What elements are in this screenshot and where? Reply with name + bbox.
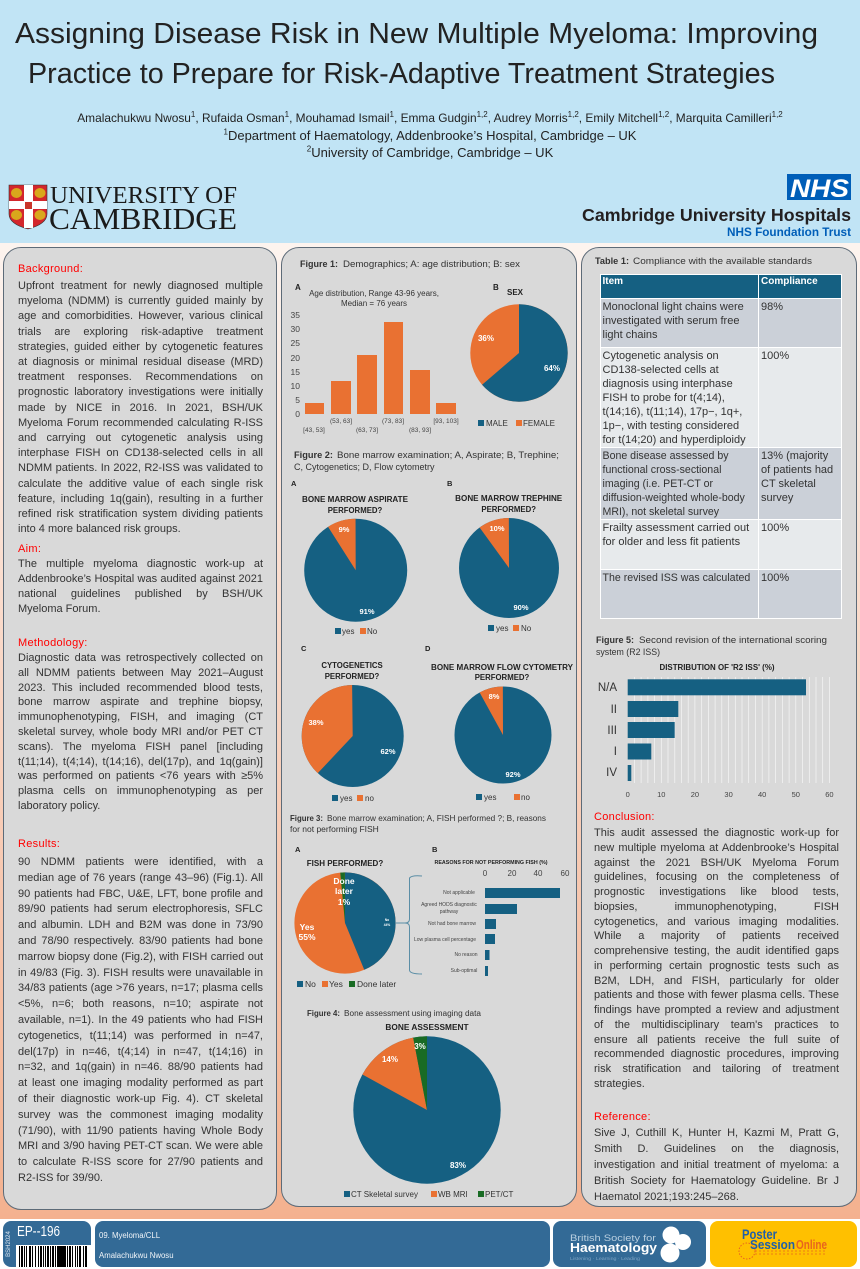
text: background: feature, including 1q(gain), resulting in a further (18, 493, 263, 505)
table 1: Monoclonal light chains were investigated with serum free light chains (602, 301, 744, 341)
panel: right column (581, 247, 857, 1207)
text: results: and 78/90 respectively. 83/90 patients had bone (18, 935, 263, 947)
chart: age distribution: Age distribution, Range 43-96 years, (309, 289, 439, 298)
chart: reasons for not performing FISH: Not had bone marrow (428, 921, 476, 927)
title (15, 18, 818, 90)
footer: British Society for Haematology logo: Haematology (570, 1241, 657, 1255)
chart: cytogenetics pie: 38% (308, 718, 324, 727)
chart: FISH performed pie: FISH PERFORMED? (307, 859, 383, 868)
text: aim: The multiple myeloma diagnostic work-up at (18, 558, 263, 570)
text: background: refined risk stratification system dividing patients (18, 508, 263, 520)
text: methodology: 2023. This included recommended blood tests, (18, 682, 263, 694)
chart: aspirate pie: yes (342, 627, 354, 636)
text: conclusion: biopsies, immunophenotyping, FISH (594, 901, 839, 913)
heading: aim: Aim: (18, 543, 41, 555)
heading: methodology: Methodology: (18, 637, 88, 649)
text: results (18, 856, 263, 1184)
chart: age distribution: [43, 53] (303, 427, 325, 434)
figure 3 caption: Bone marrow examination; A, FISH performed ?; B, reasons (327, 813, 546, 823)
chart: reasons for not performing FISH: B (432, 845, 438, 854)
text: reference: Smith D. Guidelines on the diagnosis, (594, 1143, 839, 1155)
table 1: 98% (761, 301, 783, 313)
text: aim: national guidelines published by BSH/UK (18, 588, 263, 600)
chart: flow cytometry pie: yes (484, 793, 496, 802)
table 1: t(14;16), t(11;14), 17p−, 1q+, (602, 406, 742, 418)
chart: R2 ISS distribution: 20 (691, 790, 699, 799)
logo: NHS Cambridge University Hospitals: NHS Foundation Trust (727, 225, 851, 239)
chart: FISH performed pie: Yes (329, 979, 343, 989)
table 1: 100% (761, 522, 789, 534)
footer: British Society for Haematology logo: British Society for (570, 1233, 656, 1244)
text: methodology: all NDMM patients between May 2021–August (18, 667, 263, 679)
chart: age distribution: (83, 93] (409, 427, 431, 434)
text: methodology: laboratory policy. (18, 800, 100, 812)
figure 1 caption: Demographics; A: age distribution; B: sex (343, 259, 521, 269)
chart: trephine pie: 10% (489, 524, 505, 533)
chart: age distribution: 15 (291, 367, 300, 377)
figure 3 caption: Figure 3: (290, 813, 323, 823)
barcode (16, 1245, 91, 1267)
chart: cytogenetics pie: 62% (380, 747, 396, 756)
chart: reasons for not performing FISH: 0 (483, 869, 488, 878)
table 1 caption: Table 1: (595, 256, 629, 266)
text: results: 89/90 patients had serum electrophoresis, SFLC (18, 903, 263, 915)
table 1: 100% (761, 572, 789, 584)
text: methodology: was performed on patients <76 years with ≥5% (18, 770, 263, 782)
chart: reasons for not performing FISH: 60 (561, 869, 570, 878)
chart: age distribution: (53, 63] (330, 418, 352, 425)
text: aim: Addenbrooke’s Hospital was audited against 2021 (18, 573, 263, 585)
text: conclusion: This audit assessed the diagnostic work-up for (594, 827, 839, 839)
chart: age distribution: [93, 103] (433, 418, 459, 425)
table 1: Cytogenetic analysis on (602, 350, 719, 362)
chart: age distribution: 10 (291, 381, 300, 391)
chart: flow cytometry pie: BONE MARROW FLOW CYTOMETRY (431, 663, 574, 672)
chart: reasons for not performing FISH: Sub-optimal (451, 968, 477, 974)
text: conclusion: of the multidisciplinary team's practices to (594, 1019, 839, 1031)
chart: R2 ISS distribution: IV (606, 767, 617, 779)
heading: reference: Reference: (594, 1111, 651, 1123)
text: conclusion: While a majority of patients received (594, 930, 839, 942)
chart: aspirate pie (291, 479, 408, 636)
text: methodology: scans). The myeloma FISH panel [including (18, 741, 263, 753)
chart: reasons for not performing FISH: Agreed HODS diagnostic (421, 902, 477, 908)
chart: FISH performed pie: 44% (384, 923, 390, 927)
text: methodology: plasma cells on immunophenotyping as per (18, 785, 263, 797)
figure 4 caption: Figure 4: (307, 1009, 340, 1018)
chart: reasons for not performing FISH (414, 845, 570, 976)
chart: sex pie: MALE (486, 419, 508, 428)
text: results: at least one imaging modality performed as part (18, 1077, 263, 1089)
figure 5 caption: Second revision of the international scoring (639, 635, 827, 645)
chart: bone assessment pie: BONE ASSESSMENT (385, 1022, 469, 1032)
title: Practice to Prepare for Risk-Adaptive Treatment Strategies (28, 58, 775, 90)
chart: age distribution: 0 (295, 409, 300, 419)
chart: trephine pie: BONE MARROW TREPHINE (455, 494, 562, 503)
text: reference: Haematol 2021;193:245–268. (594, 1191, 739, 1203)
logo: University of Cambridge (8, 183, 237, 233)
table 1: Frailty assessment carried out for older and less fit patients (602, 522, 749, 548)
chart: FISH performed pie: later (335, 886, 354, 896)
text: results: R2-ISS for 39/90. (18, 1172, 103, 1184)
text: results: in 49/83 (Fig. 3). FISH results were unavailable in (18, 967, 263, 979)
footer: Poster Session Online logo: Online (796, 1237, 827, 1252)
table 1: CD138-selected cells at (602, 364, 719, 376)
poster number: EP--196 (17, 1224, 60, 1240)
text: conclusion: new multiple myeloma at Addenbrooke’s Hospital (594, 842, 839, 854)
chart: sex pie (470, 283, 568, 428)
chart: trephine pie: PERFORMED? (481, 505, 536, 514)
text: methodology (18, 652, 263, 812)
table 1: diagnosis using interphase (602, 378, 733, 390)
table 1: 13% (majority of patients had CT skeletal survey (761, 450, 833, 504)
author: Amalachukwu Nwosu (99, 1251, 174, 1260)
authors and affiliations: Amalachukwu Nwosu1, Rufaida Osman1, Mouhamad Ismail1, Emma Gudgin1,2, Audrey Morris1,2, Emily Mitchell1,2, Marquita Camilleri1,2 (77, 110, 783, 125)
chart: flow cytometry pie (425, 644, 574, 802)
figures canvas (290, 259, 574, 1199)
chart: flow cytometry pie: PERFORMED? (475, 673, 530, 682)
chart: reasons for not performing FISH: 20 (508, 869, 517, 878)
text: results: median age of 76 years (range 43–96) (Fig.1). All (18, 872, 263, 884)
figure 2 caption: C, Cytogenetics; D, Flow cytometry (294, 462, 435, 472)
table 1 caption: Compliance with the available standards (633, 256, 813, 266)
text: conclusion: comprehensive testing, the audit identified gaps (594, 945, 839, 957)
text: results: <5%, n=6; both reasons, n=10; aspirate not (18, 998, 263, 1010)
text: results: 34/83 patients (age >76 years, n=17; plasma cells (18, 982, 263, 994)
table 1: 1p−, with testing considered (602, 420, 739, 432)
chart: FISH performed pie: 1% (338, 897, 351, 907)
chart: R2 ISS distribution (598, 663, 834, 799)
text: conclusion: B2M, LDH, and FISH, particularly for older (594, 975, 839, 987)
text: background: calculate the additive value of each single risk (18, 478, 263, 490)
figure 5 (596, 635, 834, 799)
footer: Poster Session Online logo: Session (750, 1237, 795, 1252)
vertical code: BSH2024 (6, 1231, 12, 1257)
footer: Poster Session Online logo: Poster (742, 1226, 777, 1242)
chart: aspirate pie: No (367, 627, 378, 636)
chart: R2 ISS distribution: II (611, 704, 617, 716)
chart: aspirate pie: 9% (339, 525, 350, 534)
chart: age distribution: 20 (291, 353, 300, 363)
text: conclusion: findings have prompted a review and adjustment (594, 1004, 839, 1016)
text: aim (18, 558, 263, 615)
chart: bone assessment pie: WB MRI (438, 1190, 468, 1199)
text: results: available, n=1). In the 49 patients who had FISH (18, 1014, 263, 1026)
chart: age distribution: Median = 76 years (341, 299, 407, 308)
text: background: into 4 more balanced risk groups. (18, 523, 181, 535)
chart: flow cytometry pie: 92% (505, 770, 521, 779)
chart: bone assessment pie: 3% (414, 1042, 426, 1051)
text: conclusion: against the 2021 BSH/UK Myeloma Forum (594, 857, 839, 869)
text: background: at diagnosis or minimal residual disease (MRD) (18, 356, 263, 368)
chart: FISH performed pie: No (305, 979, 316, 989)
chart: age distribution: 5 (295, 395, 300, 405)
chart: trephine pie: No (521, 624, 532, 633)
chart: bone assessment pie: PET/CT (485, 1190, 514, 1199)
table 1: Bone disease assessed by (602, 450, 729, 462)
chart: aspirate pie: A (291, 479, 297, 488)
table 1: diffusion-weighted whole-body (602, 492, 745, 504)
text: methodology: immunophenotyping, FISH, and imaging (CT (18, 711, 263, 723)
figure 2 caption: Figure 2: (294, 450, 333, 460)
figure 5 caption: system (R2 ISS) (596, 647, 660, 657)
text: reference: Sive J, Cuthill K, Hunter H, Kazmi M, Pratt G, (594, 1127, 839, 1139)
figure 3 caption (290, 813, 546, 834)
chart: R2 ISS distribution: 60 (825, 790, 834, 799)
footer: poster ID and barcode (3, 1221, 91, 1267)
text: methodology: skeletal survey, whole body MRI and/or PET CT (18, 726, 263, 738)
logo: NHS Cambridge University Hospitals: Cambridge University Hospitals (582, 205, 851, 225)
chart: age distribution (291, 283, 459, 434)
authors and affiliations (77, 110, 783, 160)
text: results: cytogenetics, t(11;14) was performed in n=47, (18, 1030, 263, 1042)
text: reference: investigation and initial treatment of myeloma: a (594, 1159, 839, 1171)
text: conclusion: risk stratification and tailoring of treatment (594, 1063, 839, 1075)
table 1: functional cross-sectional (602, 464, 721, 476)
chart: bone assessment pie (344, 1022, 514, 1199)
text: results: and albumin. LDH and B2M was done in 73/90 (18, 919, 263, 931)
chart: cytogenetics pie: PERFORMED? (325, 672, 380, 681)
chart: FISH performed pie: Done later (357, 979, 396, 989)
text: background: strategies, guided either by cytogenetic features (18, 341, 263, 353)
chart: bone assessment pie: CT Skeletal survey (351, 1190, 418, 1199)
chart: aspirate pie: PERFORMED? (328, 506, 383, 515)
table 1 (600, 274, 842, 619)
chart: R2 ISS distribution: DISTRIBUTION OF 'R2 ISS' (%) (660, 663, 775, 672)
chart: flow cytometry pie: no (521, 793, 530, 802)
text: background: Upfront treatment for newly diagnosed multiple (18, 280, 263, 292)
chart: R2 ISS distribution: 0 (626, 790, 630, 799)
authors and affiliations: 1Department of Haematology, Addenbrooke’s Hospital, Cambridge – UK (224, 128, 636, 143)
chart: sex pie: FEMALE (523, 419, 555, 428)
text: results: of their diagnostic work-up Fig. 4). CT skeletal (18, 1093, 263, 1105)
chart: reasons for not performing FISH: REASONS FOR NOT PERFORMING FISH (%) (434, 860, 548, 866)
chart: reasons for not performing FISH: 40 (534, 869, 543, 878)
text: background (18, 280, 263, 535)
chart: cytogenetics pie (301, 644, 404, 803)
text: results: 90 patients had FBC, U&E, LFT, bone profile and (18, 888, 263, 900)
table 1: MRI), not skeletal survey (602, 506, 719, 518)
text: results: to calculate R-ISS score for 27/90 patients and (18, 1156, 263, 1168)
chart: reasons for not performing FISH: Low plasma cell percentage (414, 937, 476, 943)
chart: trephine pie (447, 479, 562, 633)
chart: R2 ISS distribution: N/A (598, 682, 617, 694)
chart: reasons for not performing FISH: pathway (440, 909, 459, 915)
chart: trephine pie: yes (496, 624, 508, 633)
heading: background: Background: (18, 263, 83, 275)
chart: flow cytometry pie: D (425, 644, 431, 653)
chart: sex pie: SEX (507, 288, 524, 297)
chart: sex pie: 36% (478, 334, 494, 343)
title: Assigning Disease Risk in New Multiple Myeloma: Improving (15, 18, 818, 50)
text: aim: Myeloma Forum. (18, 603, 101, 615)
text: conclusion: patients and those with fewer plasma cells. These (594, 989, 839, 1001)
figure 1 caption: Figure 1: (300, 259, 338, 269)
table 1: for t(14;20) and hyperdiploidy (602, 434, 746, 446)
chart: sex pie: 64% (544, 364, 560, 373)
figure 4 caption: Bone assessment using imaging data (344, 1009, 482, 1018)
text: conclusion: strategies. (594, 1078, 645, 1090)
table 1: Item (602, 276, 623, 287)
chart: cytogenetics pie: yes (340, 794, 352, 803)
chart: R2 ISS distribution: 50 (792, 790, 800, 799)
text: results: del(17p) in n=46, t(4;14) in n=47, t(14;16) in (18, 1046, 263, 1058)
chart: trephine pie: 90% (513, 603, 529, 612)
text: results: MRI and 3/90 having PET-CT scan. We were able (18, 1140, 263, 1152)
text: conclusion: in performing certain prognostic tests such as (594, 960, 839, 972)
figure 2 caption: Bone marrow examination; A, Aspirate; B, Trephine; (337, 450, 559, 460)
chart: R2 ISS distribution: 40 (758, 790, 766, 799)
text: conclusion: prognostic investigations like blood tests, (594, 886, 839, 898)
chart: sex pie: B (493, 283, 499, 292)
chart: cytogenetics pie: CYTOGENETICS (321, 661, 383, 670)
footer: Poster Session Online logo (710, 1221, 857, 1267)
callout bracket (396, 876, 422, 974)
panel: figures column (281, 247, 577, 1207)
chart: bone assessment pie: 83% (450, 1161, 466, 1170)
text: conclusion: cytogenetics, and various imaging modalities. (594, 916, 839, 928)
text: conclusion: guidelines, focusing on the completeness of (594, 871, 839, 883)
text: results: marrow biopsy done (Fig.2), with FISH carried out (18, 951, 263, 963)
chart: FISH performed pie (294, 845, 396, 989)
table 1: FISH to probe for t(4;14), (602, 392, 725, 404)
figure 5 caption: Figure 5: (596, 635, 634, 645)
chart: cytogenetics pie: no (365, 794, 374, 803)
figure 2 caption (294, 450, 559, 472)
chart: aspirate pie: 91% (359, 607, 375, 616)
text: background: and carrying out cytogenetic analysis using (18, 432, 263, 444)
text: results: 90 NDMM patients were identified, with a (18, 856, 263, 868)
text: results: n=32, and 1q(gain) in n=46. 88/90 patients had (18, 1061, 263, 1073)
footer: British Society for Haematology logo: Listening · Learning · Leading (570, 1256, 641, 1261)
chart: R2 ISS distribution: 10 (657, 790, 665, 799)
category: 09. Myeloma/CLL (99, 1231, 160, 1240)
text: methodology: Diagnostic data was retrospectively collected on (18, 652, 263, 664)
background gradient (0, 243, 860, 1219)
text: background: made by NICE in 2016. In 2021, BSH/UK (18, 402, 263, 414)
text: background: age and comorbidities. However, various clinical (18, 310, 263, 322)
chart: age distribution: A (295, 283, 301, 292)
text: methodology: t(11;14), t(4;14), t(14;16), del(17p), and 1q(gain)] (18, 756, 263, 768)
text: background: treatment responses. Recommendations on (18, 371, 263, 383)
heading: results: Results: (18, 838, 60, 850)
chart: FISH performed pie: No (385, 918, 389, 922)
table 1: The revised ISS was calculated (602, 572, 750, 584)
footer: category and author (95, 1221, 550, 1267)
text: conclusion: recommended diagnostic procedures, improving (594, 1048, 839, 1060)
chart: age distribution: (63, 73] (356, 427, 378, 434)
chart: age distribution: 35 (291, 310, 300, 320)
text: results: survey was the commonest imaging modality (18, 1109, 263, 1121)
table 1: Compliance (761, 276, 818, 287)
text: background: interphase FISH on CD138-selected cells in all (18, 447, 263, 459)
chart: trephine pie: B (447, 479, 453, 488)
chart: aspirate pie: BONE MARROW ASPIRATE (302, 495, 408, 504)
text: background: NDMM patients. In 2022, R2-ISS was validated to (18, 462, 263, 474)
panel: left text column (3, 247, 277, 1210)
header band (0, 0, 860, 243)
text: background: myeloma (NDMM) is currently guided mainly by (18, 295, 263, 307)
chart: FISH performed pie: A (295, 845, 301, 854)
logo: NHS Cambridge University Hospitals: NHS (790, 175, 849, 203)
text: background: prognostic laboratory investigations were initially (18, 386, 263, 398)
chart: FISH performed pie: Yes (300, 922, 315, 932)
text: background: trials are exploring risk-adaptive treatment (18, 326, 263, 338)
text: conclusion (594, 827, 840, 1090)
logo: NHS Cambridge University Hospitals (582, 174, 851, 239)
chart: age distribution: (73, 83] (382, 418, 404, 425)
chart: reasons for not performing FISH: Not applicable (443, 890, 475, 896)
chart: cytogenetics pie: C (301, 644, 307, 653)
chart: flow cytometry pie: 8% (489, 692, 500, 701)
table 1: imaging (i.e. PET-CT or (602, 478, 713, 490)
chart: age distribution: 25 (291, 338, 300, 348)
chart: FISH performed pie: Done (333, 876, 355, 886)
text: results: (71/90), with 11/90 patients having Whole Body (18, 1125, 263, 1137)
figure 3 caption: for not performing FISH (290, 824, 379, 834)
chart: reasons for not performing FISH: No reason (454, 952, 478, 958)
chart: bone assessment pie: 14% (382, 1055, 398, 1064)
heading: conclusion: Conclusion: (594, 811, 655, 823)
chart: R2 ISS distribution: 30 (724, 790, 733, 799)
text: background: Myeloma Forum recommended calculating R-ISS (18, 417, 263, 429)
authors and affiliations: 2University of Cambridge, Cambridge – UK (307, 145, 553, 160)
text: methodology: bone marrow aspirate and trephine biopsy, (18, 696, 263, 708)
text: conclusion: ensure all patients receive the full suite of (594, 1034, 839, 1046)
figure 5 caption (596, 635, 827, 657)
chart: R2 ISS distribution: III (607, 725, 617, 737)
text: reference (594, 1127, 839, 1203)
chart: R2 ISS distribution: I (614, 746, 617, 758)
chart: FISH performed pie: 55% (298, 932, 316, 942)
footer: British Society for Haematology logo (553, 1221, 706, 1267)
text: reference: British Society for Haematology Guideline. Br J (594, 1175, 839, 1187)
table 1: 100% (761, 350, 789, 362)
chart: age distribution: 30 (291, 324, 300, 334)
